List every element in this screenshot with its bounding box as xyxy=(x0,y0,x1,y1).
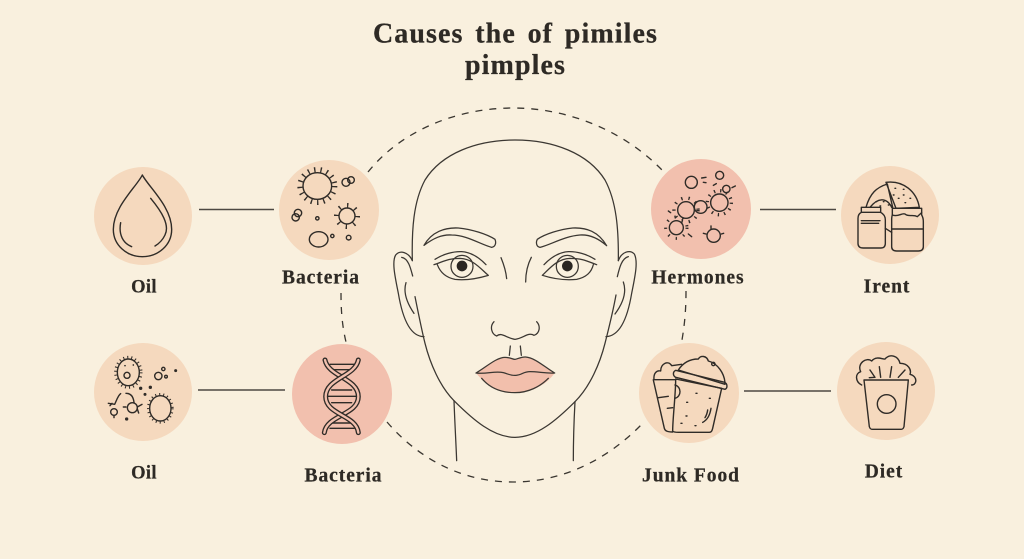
connector bottom right xyxy=(744,390,831,392)
label: Junk Food: Junk Food xyxy=(642,466,740,486)
panel: genetics xyxy=(292,344,392,486)
icon: microbes xyxy=(108,357,177,422)
panel: bacteria top xyxy=(279,160,379,288)
panel: microbes bottom left xyxy=(94,343,192,484)
label: Bacteria: Bacteria xyxy=(282,268,360,288)
left ear xyxy=(394,252,424,337)
icon: food jars xyxy=(858,182,923,251)
head outline xyxy=(412,140,618,437)
icon: DNA helix xyxy=(324,360,358,433)
icon: hormone cells xyxy=(666,171,735,242)
panel: diet xyxy=(837,342,935,482)
icon: junk food cups xyxy=(653,356,727,432)
lips xyxy=(476,357,555,393)
label: Diet: Diet xyxy=(865,462,903,482)
icon: bacteria xyxy=(292,170,358,247)
connector bottom left xyxy=(198,389,285,391)
eyebrows xyxy=(424,228,496,247)
panel: junk food xyxy=(639,343,740,486)
left eye xyxy=(434,252,488,280)
face illustration xyxy=(394,140,636,461)
icon: popcorn cup xyxy=(857,356,916,429)
panel: oil top left xyxy=(94,167,192,298)
title: Causes the of pimiles xyxy=(373,18,658,50)
label: Hormones: Hermones xyxy=(651,268,745,288)
label: Bacteria: Bacteria xyxy=(305,466,382,486)
philtrum xyxy=(509,346,521,355)
right ear xyxy=(606,252,636,337)
label: Irent: Irent xyxy=(864,276,910,298)
panel: food jars xyxy=(841,166,939,298)
connector top right xyxy=(760,208,836,210)
icon: oil drop xyxy=(113,175,172,257)
connector top left xyxy=(199,208,274,210)
label: Oil: Oil xyxy=(131,464,157,484)
dashed ring around face xyxy=(341,108,686,482)
nose xyxy=(491,257,539,339)
neck xyxy=(454,401,575,461)
title xyxy=(373,18,658,81)
title: pimples xyxy=(465,50,566,81)
label: Oil: Oil xyxy=(131,278,157,298)
right eye xyxy=(542,252,597,280)
panel: hormones xyxy=(651,159,751,288)
